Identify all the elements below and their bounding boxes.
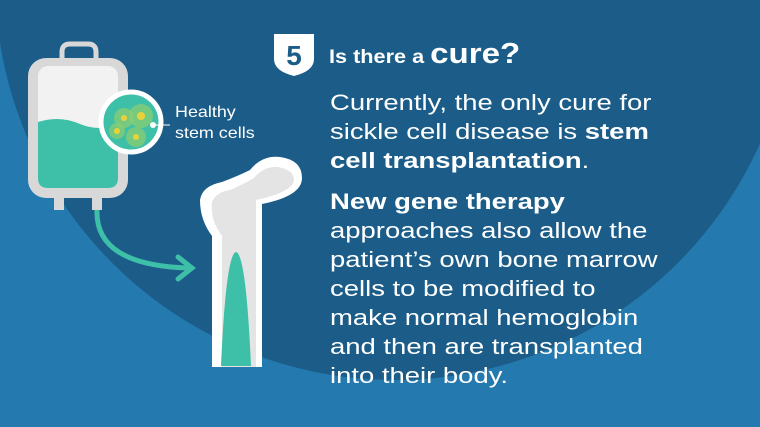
body text: make normal hemoglobin <box>330 305 638 330</box>
label: healthy stem cells: Healthy <box>175 104 236 121</box>
icon: shield number 5: 5 <box>286 40 302 71</box>
icon: bone <box>200 157 302 367</box>
heading: Is there a cure? <box>329 38 520 70</box>
label: healthy stem cells: stem cells <box>175 125 255 142</box>
icon: shield number 5 <box>274 34 314 76</box>
body text: New gene therapy <box>330 189 565 214</box>
body text: cell transplantation. <box>330 148 589 173</box>
arrow: tube to bone <box>97 210 192 279</box>
body text: patient’s own bone marrow <box>330 247 658 272</box>
body text: sickle cell disease is stem <box>330 119 649 144</box>
illustration: IV bag, arrow, bone <box>28 42 302 367</box>
icon: magnified stem cells <box>101 92 170 152</box>
body text: into their body. <box>330 363 508 388</box>
body text: Currently, the only cure for <box>330 90 651 115</box>
body text: cells to be modified to <box>330 276 596 301</box>
body text <box>330 90 658 388</box>
body text: approaches also allow the <box>330 218 647 243</box>
icon: IV bag <box>28 44 128 210</box>
label: healthy stem cells <box>175 104 255 142</box>
body text: and then are transplanted <box>330 334 643 359</box>
